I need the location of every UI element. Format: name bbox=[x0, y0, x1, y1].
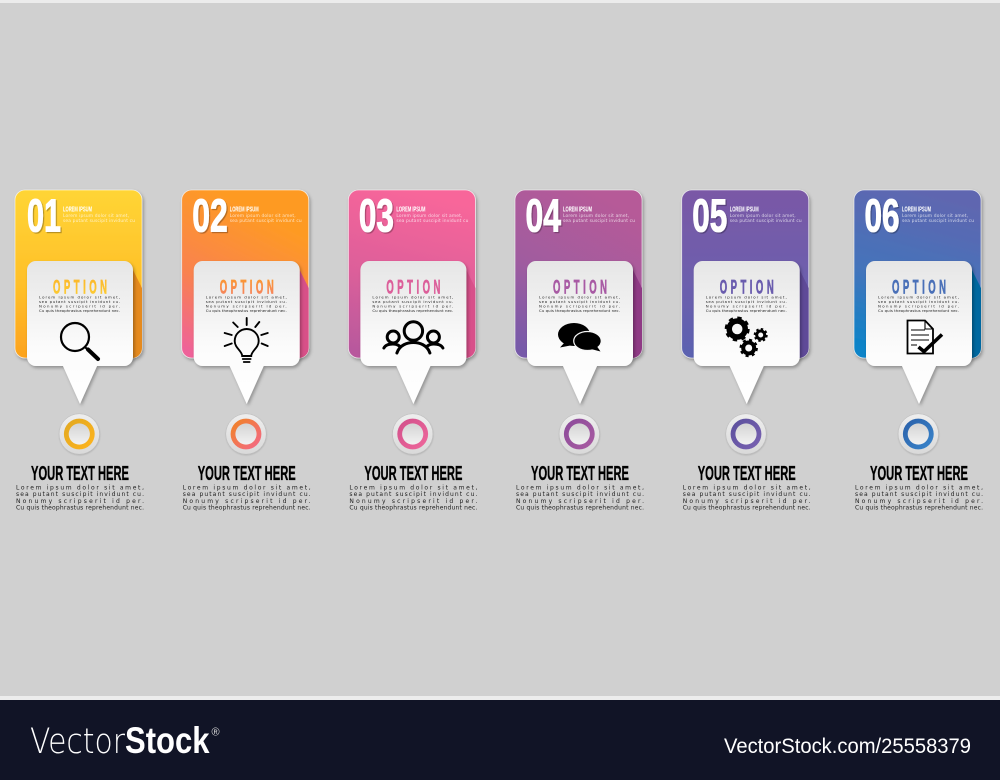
ring marker 04 bbox=[559, 414, 600, 454]
card fold 06 bbox=[969, 270, 981, 358]
number 06: 06 bbox=[864, 190, 900, 242]
ring marker 05 bbox=[726, 414, 766, 454]
header text 06 bbox=[902, 207, 974, 224]
header text 05: LOREM IPSUM bbox=[730, 207, 759, 214]
body text 04: Cu quis theophrastus reprehendunt nec. bbox=[516, 505, 644, 512]
option text 02 bbox=[206, 294, 287, 313]
body text 05: sea putant suscipit invidunt cu. bbox=[683, 491, 811, 498]
option text 06 bbox=[878, 294, 959, 313]
body text 04: sea putant suscipit invidunt cu. bbox=[516, 491, 644, 498]
option text 02: Lorem ipsum dolor sit amet, bbox=[206, 294, 287, 300]
ring marker 02 bbox=[226, 414, 266, 454]
panel: option 04 bbox=[515, 190, 644, 512]
option text 01: sea putant suscipit invidunt cu. bbox=[39, 299, 120, 304]
title 05: YOUR TEXT HERE bbox=[698, 463, 796, 485]
ring marker 03 bbox=[392, 414, 433, 454]
body text 02: sea putant suscipit invidunt cu. bbox=[183, 491, 311, 498]
card 03 bbox=[348, 190, 475, 358]
panel: option 02 bbox=[182, 190, 311, 512]
header text 01: LOREM IPSUM bbox=[63, 207, 92, 214]
body text 06: Lorem ipsum dolor sit amet, bbox=[855, 484, 983, 492]
number 01: 01 bbox=[27, 190, 61, 242]
option text 05 bbox=[706, 294, 787, 313]
card fold 05 bbox=[797, 270, 809, 358]
option text 06: Lorem ipsum dolor sit amet, bbox=[878, 294, 959, 300]
option text 05: Nonumy scripserit id per. bbox=[706, 304, 787, 308]
body text 01: Nonumy scripserit id per. bbox=[16, 498, 144, 505]
header text 01: Lorem ipsum dolor sit amet, bbox=[63, 213, 129, 219]
header text 05 bbox=[730, 207, 802, 224]
number 03: 03 bbox=[359, 190, 394, 242]
body text 06: Cu quis theophrastus reprehendunt nec. bbox=[855, 505, 983, 512]
ring marker 01 bbox=[59, 414, 100, 454]
option text 06: Nonumy scripserit id per. bbox=[878, 304, 959, 308]
option text 04 bbox=[539, 294, 620, 313]
body text 02 bbox=[183, 484, 311, 512]
card 01 bbox=[15, 190, 142, 358]
header text 02: Lorem ipsum dolor sit amet, bbox=[230, 213, 296, 219]
card 04 bbox=[515, 190, 642, 358]
option text 03 bbox=[372, 294, 453, 313]
body text 03 bbox=[349, 484, 477, 512]
icon: magnifier bbox=[61, 323, 98, 359]
panel: option 06 bbox=[854, 190, 983, 512]
card 05 bbox=[682, 190, 809, 358]
header text 04: Lorem ipsum dolor sit amet, bbox=[563, 213, 629, 219]
white pointer box 04 bbox=[527, 261, 633, 404]
icon: gears bbox=[726, 318, 767, 356]
option heading 05: OPTION bbox=[720, 277, 774, 299]
icon: people group bbox=[384, 322, 443, 353]
header text 02 bbox=[230, 207, 302, 224]
option text 01 bbox=[39, 294, 120, 313]
icon: document with check bbox=[908, 320, 942, 354]
body text 01: Lorem ipsum dolor sit amet, bbox=[16, 484, 144, 492]
header text 06: LOREM IPSUM bbox=[902, 207, 931, 214]
white pointer box 02 bbox=[194, 261, 300, 404]
header text 03: sea putant suscipit invidunt cu bbox=[396, 218, 469, 224]
option text 02: Cu quis theophrastus reprehendunt nec. bbox=[206, 308, 287, 313]
registered mark: ® bbox=[212, 726, 220, 738]
option text 03: sea putant suscipit invidunt cu. bbox=[372, 299, 453, 304]
header text 01: sea putant suscipit invidunt cu bbox=[63, 218, 135, 224]
header text 04 bbox=[563, 207, 635, 224]
option text 05: sea putant suscipit invidunt cu. bbox=[706, 299, 787, 304]
body text 02: Cu quis theophrastus reprehendunt nec. bbox=[183, 505, 311, 512]
body text 05 bbox=[683, 484, 811, 512]
body text 06: Nonumy scripserit id per. bbox=[855, 498, 983, 505]
option heading 06: OPTION bbox=[892, 277, 946, 299]
footer band bbox=[0, 696, 1000, 780]
header text 05: sea putant suscipit invidunt cu bbox=[730, 218, 802, 224]
ring marker 06 bbox=[898, 414, 938, 454]
option heading 03: OPTION bbox=[386, 277, 440, 299]
option heading 02: OPTION bbox=[220, 277, 274, 299]
option heading 04: OPTION bbox=[553, 277, 607, 299]
number 04: 04 bbox=[526, 190, 561, 242]
header text 02: LOREM IPSUM bbox=[230, 207, 259, 214]
number 02: 02 bbox=[192, 190, 228, 242]
option text 01: Lorem ipsum dolor sit amet, bbox=[39, 294, 120, 300]
title 02: YOUR TEXT HERE bbox=[198, 463, 296, 485]
option text 05: Lorem ipsum dolor sit amet, bbox=[706, 294, 787, 300]
header text 06: Lorem ipsum dolor sit amet, bbox=[902, 213, 968, 219]
footer image id: VectorStock.com/25558379 bbox=[724, 734, 971, 758]
footer logo bbox=[30, 720, 210, 762]
white pointer box 03 bbox=[360, 261, 466, 404]
header text 01 bbox=[63, 207, 135, 224]
icon: light bulb bbox=[225, 318, 268, 362]
card fold 01 bbox=[130, 270, 142, 358]
option text 04: Lorem ipsum dolor sit amet, bbox=[539, 294, 620, 300]
white pointer box 06 bbox=[866, 261, 972, 404]
number 05: 05 bbox=[692, 190, 727, 242]
body text 06: sea putant suscipit invidunt cu. bbox=[855, 491, 983, 498]
white pointer box 01 bbox=[27, 261, 133, 404]
option text 01: Nonumy scripserit id per. bbox=[39, 304, 120, 308]
option text 02: sea putant suscipit invidunt cu. bbox=[206, 299, 287, 304]
panel: option 01 bbox=[15, 190, 144, 512]
header text 04: LOREM IPSUM bbox=[563, 207, 592, 214]
option text 06: sea putant suscipit invidunt cu. bbox=[878, 299, 959, 304]
option text 04: sea putant suscipit invidunt cu. bbox=[539, 299, 620, 304]
body text 03: Cu quis theophrastus reprehendunt nec. bbox=[349, 505, 477, 512]
option text 05: Cu quis theophrastus reprehendunt nec. bbox=[706, 308, 787, 313]
body text 03: Nonumy scripserit id per. bbox=[349, 498, 477, 505]
footer logo: Stock bbox=[125, 720, 210, 761]
option text 03: Nonumy scripserit id per. bbox=[372, 304, 453, 308]
header text 06: sea putant suscipit invidunt cu bbox=[902, 218, 974, 224]
body text 01: Cu quis theophrastus reprehendunt nec. bbox=[16, 505, 144, 512]
option text 03: Cu quis theophrastus reprehendunt nec. bbox=[372, 308, 453, 313]
body text 03: sea putant suscipit invidunt cu. bbox=[349, 491, 477, 498]
option text 06: Cu quis theophrastus reprehendunt nec. bbox=[878, 308, 959, 313]
card fold 02 bbox=[297, 270, 309, 358]
card 02 bbox=[182, 190, 309, 358]
body text 01 bbox=[16, 484, 144, 512]
body text 04 bbox=[516, 484, 644, 512]
footer logo: Vector bbox=[30, 722, 126, 762]
header text 03 bbox=[396, 207, 469, 224]
option heading 01: OPTION bbox=[53, 277, 107, 299]
title 04: YOUR TEXT HERE bbox=[531, 463, 629, 485]
body text 04: Lorem ipsum dolor sit amet, bbox=[516, 484, 644, 492]
icon: chat bubbles bbox=[558, 323, 601, 352]
body text 02: Nonumy scripserit id per. bbox=[183, 498, 311, 505]
header text 03: Lorem ipsum dolor sit amet, bbox=[396, 213, 462, 219]
option text 04: Nonumy scripserit id per. bbox=[539, 304, 620, 308]
body text 05: Cu quis theophrastus reprehendunt nec. bbox=[683, 505, 811, 512]
body text 04: Nonumy scripserit id per. bbox=[516, 498, 644, 505]
body text 03: Lorem ipsum dolor sit amet, bbox=[349, 484, 477, 492]
panel: option 05 bbox=[682, 190, 811, 512]
option text 02: Nonumy scripserit id per. bbox=[206, 304, 287, 308]
body text 02: Lorem ipsum dolor sit amet, bbox=[183, 484, 311, 492]
card fold 03 bbox=[463, 270, 475, 358]
top light strip bbox=[0, 0, 1000, 3]
card 06 bbox=[854, 190, 981, 358]
title 01: YOUR TEXT HERE bbox=[31, 463, 129, 485]
header text 05: Lorem ipsum dolor sit amet, bbox=[730, 213, 796, 219]
body text 06 bbox=[855, 484, 983, 512]
card fold 04 bbox=[630, 270, 642, 358]
option text 01: Cu quis theophrastus reprehendunt nec. bbox=[39, 308, 120, 313]
option text 03: Lorem ipsum dolor sit amet, bbox=[372, 294, 453, 300]
title 03: YOUR TEXT HERE bbox=[364, 463, 462, 485]
body text 05: Nonumy scripserit id per. bbox=[683, 498, 811, 505]
white pointer box 05 bbox=[694, 261, 800, 404]
header text 02: sea putant suscipit invidunt cu bbox=[230, 218, 302, 224]
body text 01: sea putant suscipit invidunt cu. bbox=[16, 491, 144, 498]
option text 04: Cu quis theophrastus reprehendunt nec. bbox=[539, 308, 620, 313]
header text 04: sea putant suscipit invidunt cu bbox=[563, 218, 635, 224]
header text 03: LOREM IPSUM bbox=[396, 207, 425, 214]
panel: option 03 bbox=[348, 190, 477, 512]
body text 05: Lorem ipsum dolor sit amet, bbox=[683, 484, 811, 492]
